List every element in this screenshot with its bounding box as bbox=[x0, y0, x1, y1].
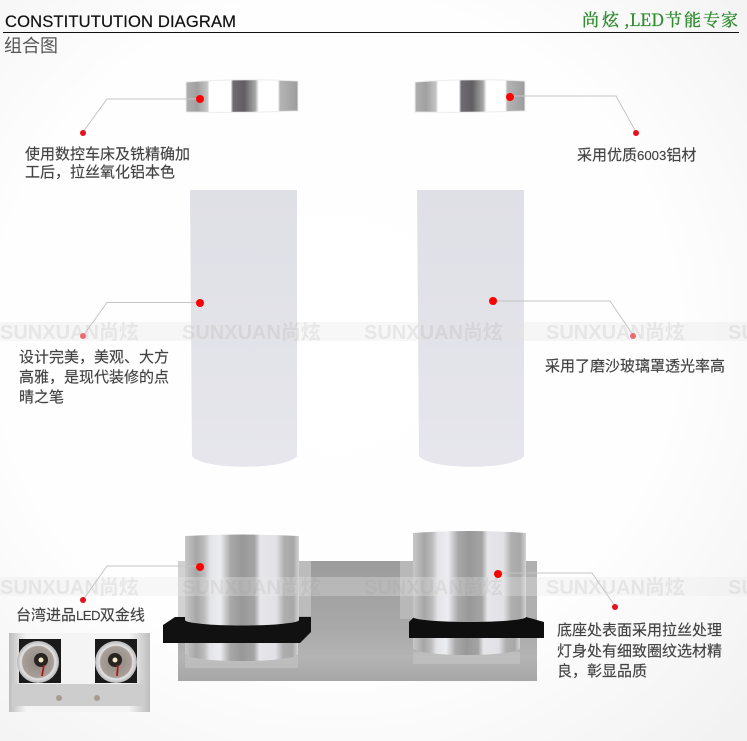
black bracket left bbox=[163, 617, 311, 643]
callout: base surface: 良，彰显品质 bbox=[557, 662, 647, 680]
callout: glass left: 设计完美，美观、大方 bbox=[19, 349, 169, 366]
callout: gold wire bbox=[16, 563, 204, 624]
callout: base surface bbox=[494, 570, 722, 680]
header rule bbox=[3, 32, 739, 33]
lower cylinder left bbox=[185, 642, 298, 661]
brand slogan: 家 bbox=[721, 6, 738, 31]
watermark band lower: SUNXUAN尚炫 bbox=[182, 575, 321, 599]
callout: ring right bbox=[506, 93, 696, 164]
aluminium ring right bbox=[415, 80, 525, 112]
callout: ring right: 采用优质6003铝材 bbox=[577, 147, 696, 164]
brand slogan: 尚 bbox=[582, 6, 599, 31]
lower cylinder right bbox=[413, 637, 520, 655]
brand slogan bbox=[582, 6, 738, 31]
watermark band upper: SUNXUAN尚炫 bbox=[0, 320, 139, 344]
callout: base surface: 灯身处有细致圈纹选材精 bbox=[557, 643, 722, 660]
brand slogan: 专 bbox=[703, 6, 720, 31]
black bracket right bbox=[409, 617, 544, 638]
right LED cup bbox=[95, 639, 137, 683]
callout: ring left bbox=[25, 95, 204, 181]
watermark band upper: SUNXUAN尚炫 bbox=[364, 320, 503, 344]
upper cylinder left bbox=[185, 534, 299, 626]
callout: glass left: 高雅，是现代装修的点 bbox=[19, 369, 169, 386]
left LED cup bbox=[17, 639, 61, 683]
upper cylinder right bbox=[413, 531, 526, 622]
aluminium ring left bbox=[186, 80, 298, 112]
watermark band lower: SUNXUAN尚炫 bbox=[0, 575, 139, 599]
base bar bbox=[12, 684, 144, 706]
callout: gold wire: 台湾进品LED双金线 bbox=[16, 607, 145, 624]
callout: ring left: 工后，拉丝氧化铝本色 bbox=[25, 164, 175, 181]
watermark band upper: SUNXUAN尚炫 bbox=[546, 320, 685, 344]
LED close-up photo bbox=[9, 633, 150, 712]
header bbox=[3, 12, 739, 56]
callout: ring left: 使用数控车床及铣精确加 bbox=[25, 146, 190, 163]
title: constitution diagram: CONSTITUTUTION DIAGRAM bbox=[5, 12, 236, 31]
callout: glass left: 晴之笔 bbox=[19, 389, 64, 406]
frosted glass left bbox=[190, 190, 297, 467]
callout: glass right: 采用了磨沙玻璃罩透光率高 bbox=[545, 358, 725, 375]
frosted glass right bbox=[417, 190, 524, 467]
callout: glass left bbox=[19, 299, 204, 406]
callout: base surface: 底座处表面采用拉丝处理 bbox=[557, 622, 722, 639]
watermark band lower: SUNXUAN尚炫 bbox=[364, 575, 503, 599]
watermark band lower bbox=[0, 575, 747, 599]
brand slogan: 能 bbox=[684, 6, 701, 31]
watermark band upper bbox=[0, 320, 747, 344]
brand slogan: 节 bbox=[665, 6, 682, 31]
brand slogan: 炫 bbox=[602, 6, 620, 31]
plate reflections bbox=[178, 561, 537, 668]
lamp assembly bbox=[163, 531, 544, 681]
screws bbox=[56, 695, 100, 701]
brushed back plate bbox=[178, 561, 537, 681]
watermark band upper: SUNXUAN尚炫 bbox=[182, 320, 321, 344]
watermark band lower: SUNXUAN尚炫 bbox=[546, 575, 685, 599]
callout: glass right bbox=[489, 297, 725, 375]
brand slogan: ,LED bbox=[624, 6, 664, 31]
subtitle: 组合图 bbox=[4, 36, 58, 56]
